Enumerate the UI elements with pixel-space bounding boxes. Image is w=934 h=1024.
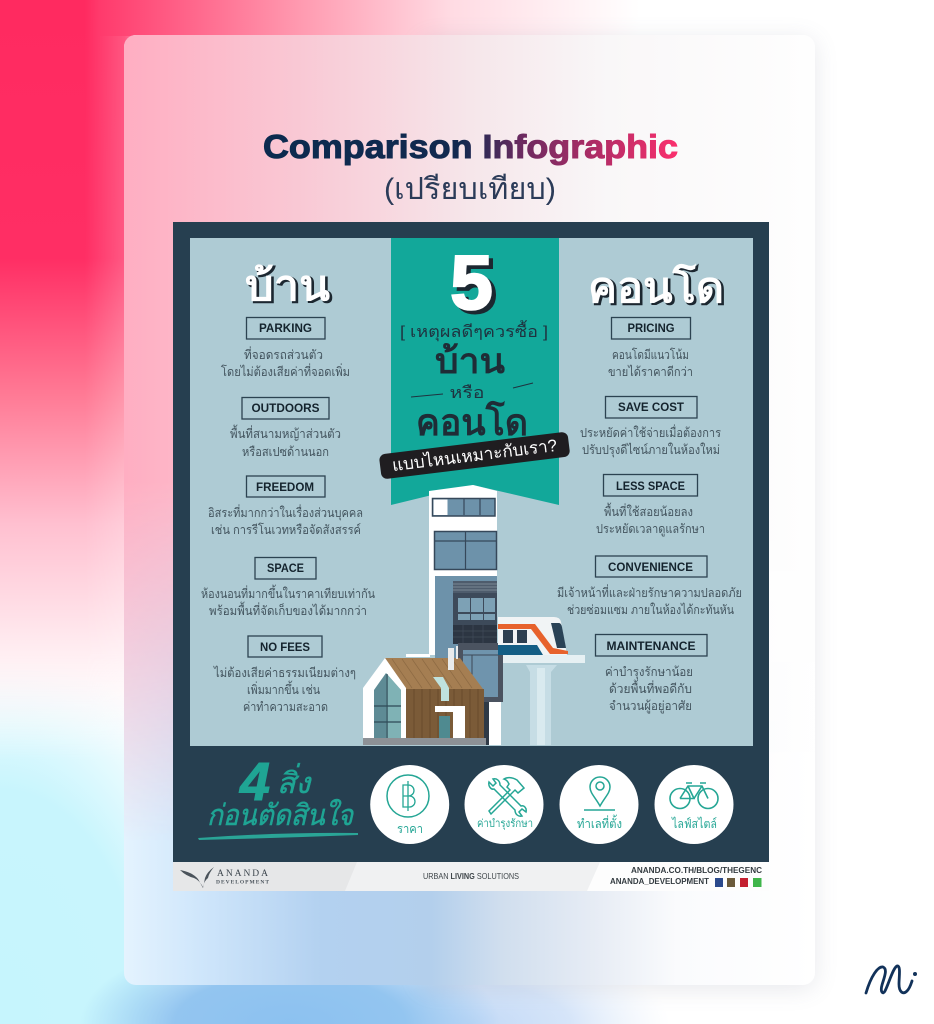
no fees (213, 636, 356, 714)
left column: house reasons (201, 318, 375, 714)
circle: location: ทำเลที่ตั้ง (577, 814, 622, 831)
freedom: FREEDOM (256, 480, 314, 494)
parking (221, 318, 350, 379)
no fees: NO FEES (260, 640, 310, 654)
pricing: ขายได้ราคาดีกว่า (608, 365, 693, 379)
convenience: มีเจ้าหน้าที่และฝ่ายรักษาความปลอดภัย (557, 584, 742, 600)
outdoors: OUTDOORS (252, 401, 320, 415)
maintenance: ด้วยพื้นที่พอดีกับ (609, 679, 692, 696)
underline stroke (198, 833, 358, 840)
ribbon headline (379, 241, 570, 479)
space: ห้องนอนที่มากขึ้นในราคาเทียบเท่ากัน (201, 584, 375, 601)
heading: house: บ้าน (245, 262, 330, 309)
illustration: condo tower (406, 485, 503, 745)
ananda logo (180, 867, 269, 888)
maintenance: จำนวนผู้อยู่อาศัย (609, 699, 692, 714)
four things heading: 4 (239, 752, 270, 812)
circle: maintenance (464, 765, 544, 844)
maintenance (596, 634, 707, 714)
brand mark (866, 966, 917, 993)
title: Comparison Infographic (263, 128, 678, 165)
outdoors: หรือสเปซด้านนอก (242, 445, 329, 459)
circle: lifestyle: ไลฟ์สไตล์ (671, 817, 717, 831)
illustration: sky train (498, 617, 585, 745)
circle: price (370, 765, 449, 844)
page background gradient (0, 0, 642, 1024)
save cost (580, 396, 721, 458)
circle: maintenance: ค่าบำรุงรักษา (477, 818, 533, 830)
circle: price: ราคา (397, 822, 423, 836)
four things heading: ก่อนตัดสินใจ (207, 798, 355, 832)
no fees: เพิ่มมากขึ้น เช่น (247, 680, 320, 697)
card panel (124, 35, 815, 989)
number five: 5 (450, 241, 493, 326)
social handle: ANANDA_DEVELOPMENT (610, 877, 709, 886)
circle: lifestyle (654, 765, 734, 844)
space (201, 558, 375, 618)
social icons (715, 878, 762, 887)
pricing: คอนโดมีแนวโน้ม (612, 347, 689, 362)
outdoors (230, 398, 341, 459)
ananda logo: DEVELOPMENT (216, 880, 269, 886)
black pill question: แบบไหนเหมาะกับเรา? (391, 435, 558, 475)
infographic poster (173, 222, 769, 891)
heading: house: บ้าน (247, 264, 332, 310)
heading: condo: คอนโด (590, 264, 726, 312)
convenience (557, 556, 742, 617)
convenience: ช่วยซ่อมแซม ภายในห้องได้กะทันหัน (567, 603, 734, 617)
light panel (190, 238, 753, 746)
save cost: ประหยัดค่าใช้จ่ายเมื่อต้องการ (580, 424, 721, 440)
circle: location (560, 765, 638, 844)
house word: บ้าน (435, 342, 505, 381)
maintenance: MAINTENANCE (606, 639, 696, 653)
less space (596, 474, 705, 537)
maintenance: ค่าบำรุงรักษาน้อย (605, 665, 693, 680)
number five: 5 (454, 244, 497, 330)
pricing: PRICING (628, 321, 674, 335)
right column: condo reasons (557, 318, 742, 714)
space: พร้อมพื้นที่จัดเก็บของได้มากกว่า (209, 601, 367, 618)
or word: หรือ (450, 384, 484, 402)
teal ribbon (391, 238, 559, 505)
reasons line: [ เหตุผลดีๆควรซื้อ ] (400, 320, 548, 342)
four things heading: สิ่ง (277, 763, 312, 800)
no fees: ไม่ต้องเสียค่าธรรมเนียมต่างๆ (213, 666, 356, 680)
heading: condo: คอนโด (588, 263, 724, 311)
illustration: house (363, 646, 486, 745)
poster dark background (173, 222, 769, 863)
ananda logo: ANANDA (217, 869, 268, 879)
convenience: CONVENIENCE (608, 560, 693, 574)
less space: ประหยัดเวลาดูแลรักษา (596, 522, 705, 537)
save cost: SAVE COST (618, 400, 685, 414)
condo word: คอนโด (416, 400, 528, 443)
website: ANANDA.CO.TH/BLOG/THEGENC (631, 866, 762, 875)
less space: พื้นที่ใช้สอยน้อยลง (604, 502, 693, 519)
parking: ที่จอดรถส่วนตัว (244, 346, 323, 362)
freedom (208, 476, 363, 537)
four things heading (198, 752, 358, 840)
subtitle: (เปรียบเทียบ) (384, 173, 556, 206)
less space: LESS SPACE (616, 479, 685, 493)
footer bar (173, 862, 769, 891)
space: SPACE (267, 561, 304, 575)
freedom: อิสระที่มากกว่าในเรื่องส่วนบุคคล (208, 504, 363, 521)
parking: PARKING (259, 321, 312, 335)
or word (411, 383, 533, 402)
no fees: ค่าทำความสะอาด (243, 700, 328, 714)
tagline: URBAN LIVING SOLUTIONS (423, 871, 519, 881)
pricing (608, 318, 693, 379)
outdoors: พื้นที่สนามหญ้าส่วนตัว (230, 424, 341, 441)
freedom: เช่น การรีโนเวทหรือจัดสังสรรค์ (211, 522, 361, 537)
save cost: ปรับปรุงดีไซน์ภายในห้องใหม่ (582, 443, 720, 458)
parking: โดยไม่ต้องเสียค่าที่จอดเพิ่ม (221, 363, 350, 379)
